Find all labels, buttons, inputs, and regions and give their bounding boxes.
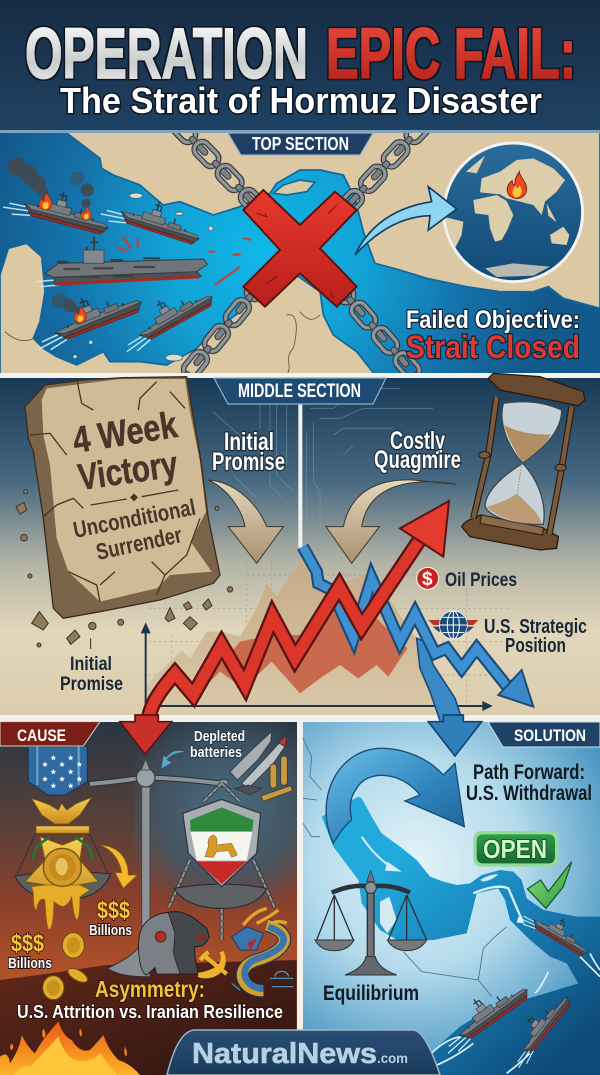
icon: missiles and bullets [230,732,293,801]
legend: oil prices: Oil Prices [445,570,517,591]
water [0,133,600,373]
panel: middle section [0,373,600,737]
tab label: CAUSE [17,726,66,745]
down arrow gold [100,845,137,888]
cost: billions lower: Billions [8,955,52,972]
land [0,132,600,375]
stone text: unconditional surrender [71,494,198,565]
chains [172,133,430,373]
icon: balance scale [315,871,427,975]
melting medal [25,797,98,930]
ships [428,899,600,1073]
label: depleted batteries: Depleted [194,728,245,745]
coins [43,933,90,1000]
callout: failed objective [406,306,580,365]
arrow to globe [355,187,457,255]
callout: failed objective: Strait Closed [406,329,580,365]
tab label: TOP SECTION [252,134,349,154]
arrow: strategic position falling [303,547,533,728]
aircraft carrier [37,237,207,287]
circuit lines [213,388,433,542]
icon: oil dollar [417,567,439,589]
tab: middle section [214,378,386,404]
label: depleted batteries: batteries [190,744,242,761]
chart grid [148,562,510,705]
quagmire arrow [326,480,457,563]
stone text: unconditional surrender: Unconditional [71,494,198,543]
label: costly quagmire [374,427,461,474]
asymmetry caption: U.S. Attrition vs. Iranian Resilience [17,1001,283,1022]
asymmetry caption [17,976,283,1022]
cost: billions upper: Billions [89,922,132,939]
icon: armored bear [139,912,209,975]
small islands [73,193,213,361]
icon: check mark [527,862,572,908]
label: lower initial promise: Promise [60,674,123,695]
legend: strategic position: Position [505,635,566,657]
dollar glyph: $ [422,569,433,590]
panel: cause [0,715,297,1075]
stone text: 4 week victory [70,404,180,498]
label: lower initial promise [60,654,123,695]
cost: billions lower [8,930,52,972]
equilibrium label: Equilibrium [323,982,419,1005]
button: open [473,831,558,867]
chart axes [141,622,493,711]
tab: solution [488,722,600,747]
stone text: 4 week victory: Victory [75,443,180,498]
cost: billions lower: $$$ [11,930,45,957]
open text: OPEN [483,834,547,864]
missile streaks [117,237,251,285]
asymmetry caption: Asymmetry: [95,976,205,1002]
cost: billions upper: $$$ [97,897,131,924]
tab: top section [228,133,373,155]
globe [443,143,583,282]
shield pan and chains [168,783,275,940]
tab label: MIDDLE SECTION [238,381,361,402]
stone text: 4 week victory: 4 Week [70,404,180,461]
legend: strategic position [484,616,587,657]
medal ribbon [28,747,87,795]
label: initial promise [212,428,285,476]
panel: top section map [0,115,600,396]
icon: dragon [232,908,293,991]
tab: solution: SOLUTION [514,726,586,745]
big curved arrow [326,748,464,843]
center divider [298,404,302,548]
icon: red X [243,190,357,307]
strait water [322,797,600,1075]
path forward caption [466,760,592,805]
cost: billions upper [89,897,132,939]
burning ship fleet [2,158,217,356]
tab: cause [0,722,100,746]
icon: Iranian shield [183,799,261,887]
label: costly quagmire: Quagmire [374,446,461,474]
brand footer: .com [377,1050,408,1066]
icon: hammer and sickle [198,952,227,976]
down arrow head blue [428,715,482,756]
stone text: unconditional surrender: Surrender [94,521,184,565]
label: initial promise: Promise [212,448,285,476]
panel: solution [303,715,600,1075]
scale beam and pole [90,759,227,977]
stone tablet [16,377,233,647]
chart areas [147,560,433,706]
depleted arrow [162,751,185,768]
icon: strategic globe [428,611,478,639]
hourglass [462,373,585,550]
left pan [15,832,111,900]
arrow: oil prices rising [147,501,449,737]
label: costly quagmire: Costly [390,427,445,455]
promise arrow [208,480,283,563]
header banner [0,0,600,133]
brand footer [167,1030,440,1075]
ground [0,960,297,1075]
subtitle: The Strait of Hormuz Disaster [60,80,542,121]
flames [0,1022,140,1075]
brand footer: NaturalNews [192,1038,377,1070]
label: initial promise: Initial [224,428,274,456]
label: lower initial promise: Initial [70,654,112,675]
title: OPERATION [25,15,308,94]
label: depleted batteries [190,728,245,761]
down arrow head red [120,715,172,754]
